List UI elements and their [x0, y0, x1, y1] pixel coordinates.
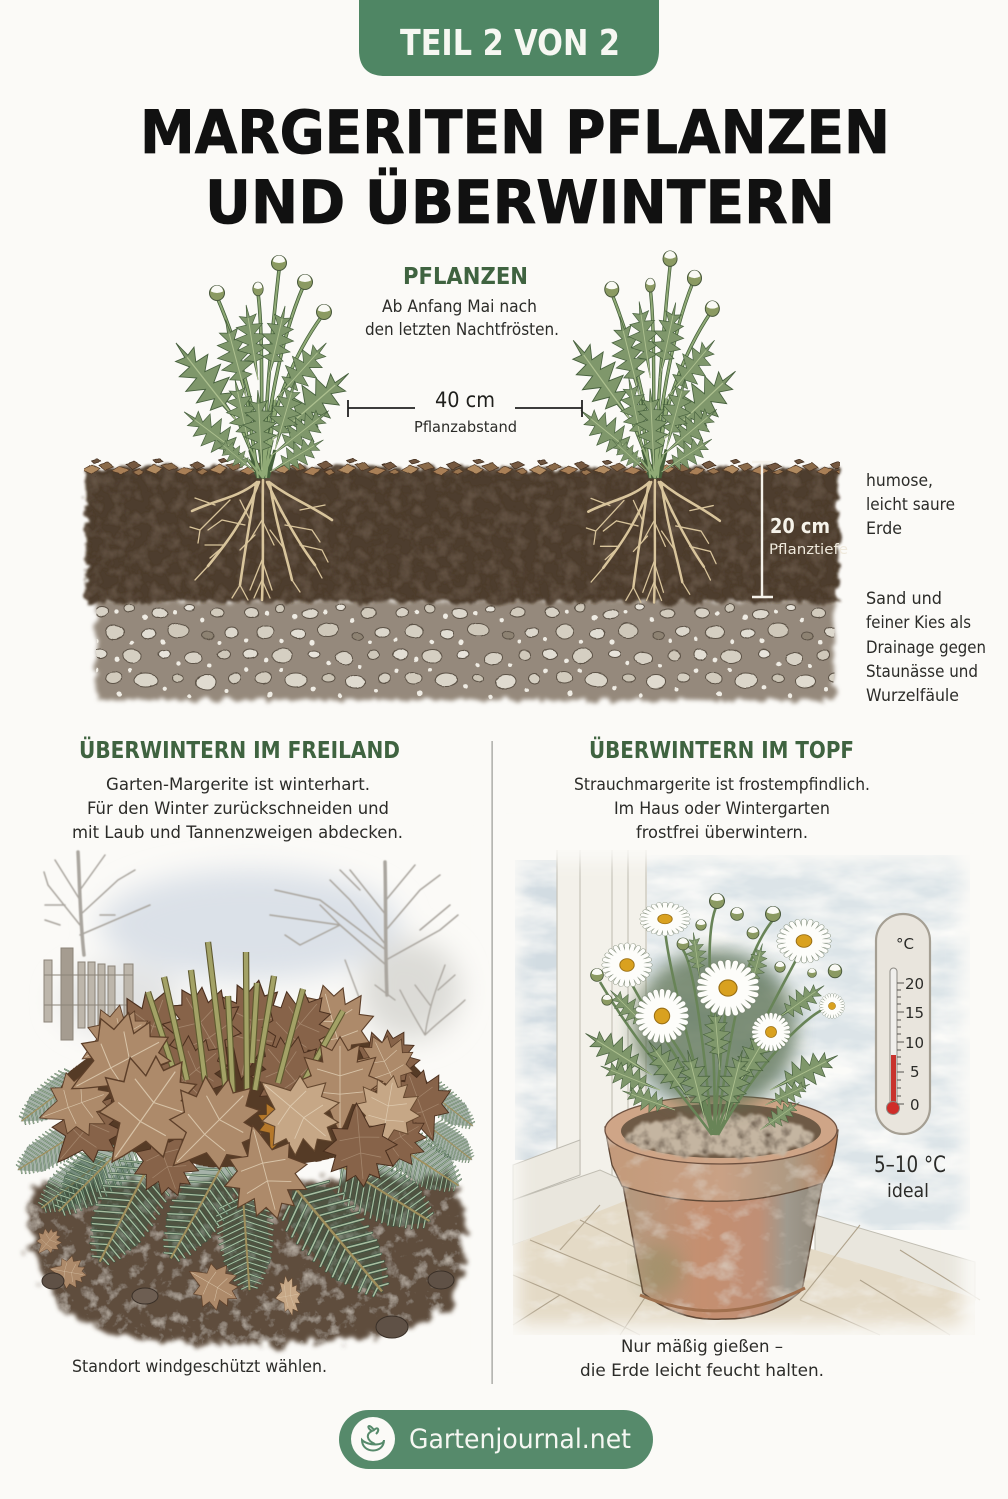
- label: drainage: Drainage gegen: [866, 638, 986, 657]
- label: soil: [866, 471, 955, 538]
- label: drainage: [866, 589, 986, 705]
- spacing dimension 40 cm: 40 cm: [435, 388, 495, 412]
- label: soil: leicht saure: [866, 495, 955, 514]
- flowering plant: [577, 894, 845, 1138]
- blue-grey wall: [645, 855, 970, 1230]
- heading: Überwintern im Freiland: ÜBERWINTERN IM FREILAND: [79, 736, 400, 764]
- title: MARGERITEN PFLANZEN: [140, 98, 890, 168]
- location note: Standort windgeschützt wählen.: [72, 1357, 327, 1376]
- thermometer: 5: [910, 1063, 920, 1081]
- spacing dimension 40 cm: [348, 388, 582, 436]
- heading: Überwintern im Topf: [574, 736, 870, 842]
- gravel drainage layer: [96, 600, 834, 700]
- skirting boards: [513, 1170, 975, 1300]
- label: soil: Erde: [866, 519, 902, 538]
- depth marker 20 cm: Pflanztiefe: [769, 542, 848, 558]
- heading: Überwintern im Freiland: [72, 736, 403, 842]
- footer brand pill: [339, 1410, 653, 1469]
- soil layer: [86, 468, 838, 602]
- depth marker 20 cm: [752, 462, 848, 597]
- label: drainage: Sand und: [866, 589, 942, 608]
- terracotta pot: [605, 1096, 838, 1319]
- title: UND ÜBERWINTERN: [205, 167, 835, 238]
- label: drainage: Staunässe und: [866, 662, 978, 681]
- thermometer: 10: [905, 1034, 924, 1052]
- heading: Überwintern im Freiland: Garten-Margerite ist winterhart.: [106, 775, 370, 794]
- badge: part 2 of 2: [359, 0, 659, 76]
- panel: planting cross-section: [84, 251, 848, 700]
- dead leaf mound: [60, 970, 433, 1167]
- ideal temperature label: ideal: [887, 1180, 929, 1202]
- front leaves: [28, 995, 464, 1319]
- heading: Pflanzen: Ab Anfang Mai nach: [382, 297, 537, 316]
- heading: Überwintern im Topf: Im Haus oder Wintergarten: [614, 799, 830, 818]
- ideal temperature label: 5–10 °C: [874, 1153, 946, 1178]
- panel: potted plant illustration: [505, 848, 980, 1338]
- label: drainage: Wurzelfäule: [866, 686, 959, 705]
- stones: [42, 1271, 454, 1338]
- heading: Pflanzen: den letzten Nachtfrösten.: [365, 320, 559, 339]
- thermometer: 15: [905, 1004, 924, 1022]
- title: [140, 98, 890, 238]
- heading: Überwintern im Freiland: mit Laub und Tannenzweigen abdecken.: [72, 823, 403, 842]
- thermometer: 0: [910, 1096, 920, 1114]
- thermometer: [876, 914, 930, 1134]
- watering note: die Erde leicht feucht halten.: [580, 1361, 824, 1380]
- window with frame: [513, 850, 647, 1200]
- heading: Überwintern im Freiland: Für den Winter zurückschneiden und: [87, 799, 389, 818]
- ideal temperature label: [874, 1153, 946, 1202]
- tiled floor: [513, 1195, 980, 1335]
- label: drainage: feiner Kies als: [866, 613, 971, 632]
- bare trees: [44, 852, 465, 1035]
- heading: Überwintern im Topf: ÜBERWINTERN IM TOPF: [589, 736, 854, 764]
- plant right with roots: [557, 251, 749, 602]
- fir branches: [8, 1060, 483, 1315]
- heading: Pflanzen: PFLANZEN: [403, 264, 528, 290]
- leaf litter on soil: [84, 459, 840, 477]
- plant left with roots: [159, 256, 363, 600]
- footer brand pill: Gartenjournal.net: [409, 1424, 631, 1455]
- watering note: Nur mäßig gießen –: [621, 1337, 783, 1356]
- cut stems: [148, 942, 343, 1100]
- depth marker 20 cm: 20 cm: [770, 514, 830, 538]
- winter sky background: [60, 870, 460, 1040]
- panel: winter garden illustration: [8, 852, 483, 1344]
- badge: part 2 of 2: TEIL 2 VON 2: [400, 23, 620, 64]
- soft scene edge fade: [505, 848, 975, 1338]
- heading: Überwintern im Topf: frostfrei überwintern.: [636, 823, 808, 842]
- heading: Pflanzen: [365, 264, 559, 339]
- thermometer: 20: [905, 975, 924, 993]
- icon: sprout logo: [351, 1417, 395, 1461]
- spacing dimension 40 cm: Pflanzabstand: [414, 418, 517, 436]
- label: soil: humose,: [866, 471, 933, 490]
- wooden fence: [44, 948, 133, 1040]
- heading: Überwintern im Topf: Strauchmargerite ist frostempfindlich.: [574, 775, 870, 794]
- ground soil: [30, 1175, 464, 1344]
- watering note: [580, 1337, 824, 1380]
- thermometer: °C: [896, 935, 914, 953]
- column divider: [492, 741, 493, 1384]
